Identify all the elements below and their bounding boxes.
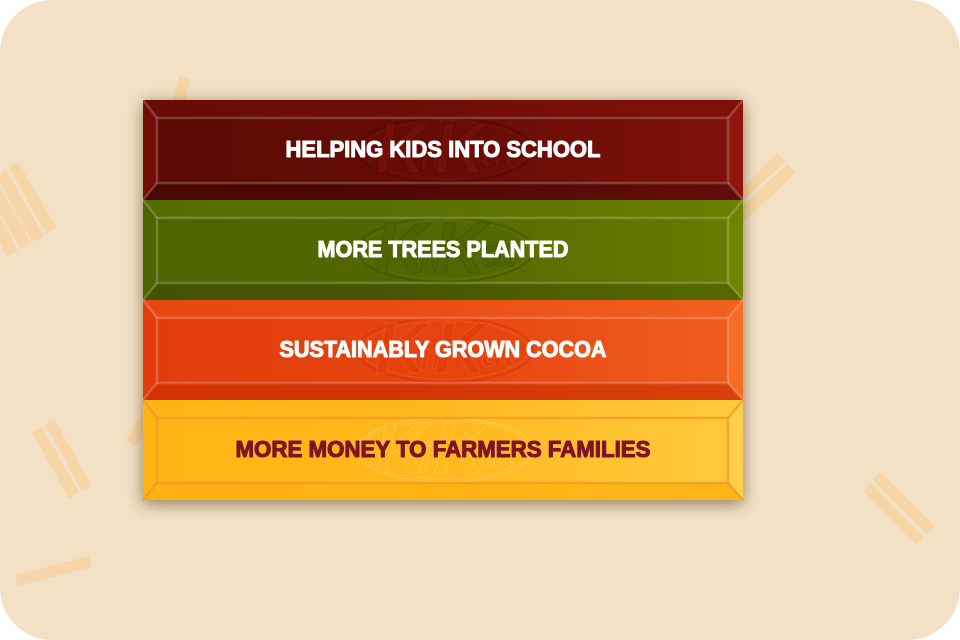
segment: sustainably grown cocoa: SUSTAINABLY GROWN COCOA	[280, 336, 606, 362]
embossed logo: at	[482, 233, 517, 275]
embossed logo: K	[434, 309, 491, 389]
segment: more money to farmers families	[143, 400, 743, 500]
embossed logo: it	[420, 337, 445, 379]
segment: sustainably grown cocoa	[143, 300, 743, 400]
segment: helping kids into school	[143, 100, 743, 200]
decorative wafer sticks	[0, 76, 935, 586]
embossed logo	[358, 218, 532, 283]
embossed logo: K	[434, 109, 491, 189]
chocolate bar	[143, 100, 743, 500]
embossed logo: K	[375, 209, 432, 289]
segment: more trees planted: MORE TREES PLANTED	[318, 236, 568, 262]
embossed logo: it	[420, 437, 445, 479]
embossed logo	[358, 419, 534, 482]
embossed logo: at	[482, 433, 517, 475]
embossed logo: at	[482, 133, 517, 175]
segment: more money to farmers families: MORE MONEY TO FARMERS FAMILIES	[236, 436, 650, 462]
embossed logo: K	[434, 409, 491, 489]
embossed logo	[356, 318, 534, 383]
embossed logo: K	[375, 409, 432, 489]
embossed logo: K	[375, 309, 432, 389]
segment: helping kids into school: HELPING KIDS INTO SCHOOL	[286, 136, 600, 162]
chocolate bar shadow	[143, 103, 743, 504]
embossed logo: it	[420, 137, 445, 179]
embossed logo: at	[482, 333, 517, 375]
embossed logo: K	[434, 209, 491, 289]
embossed logo: K	[375, 109, 432, 189]
embossed logo	[356, 118, 534, 183]
segment: more trees planted	[143, 200, 743, 300]
embossed logo: it	[420, 237, 445, 279]
